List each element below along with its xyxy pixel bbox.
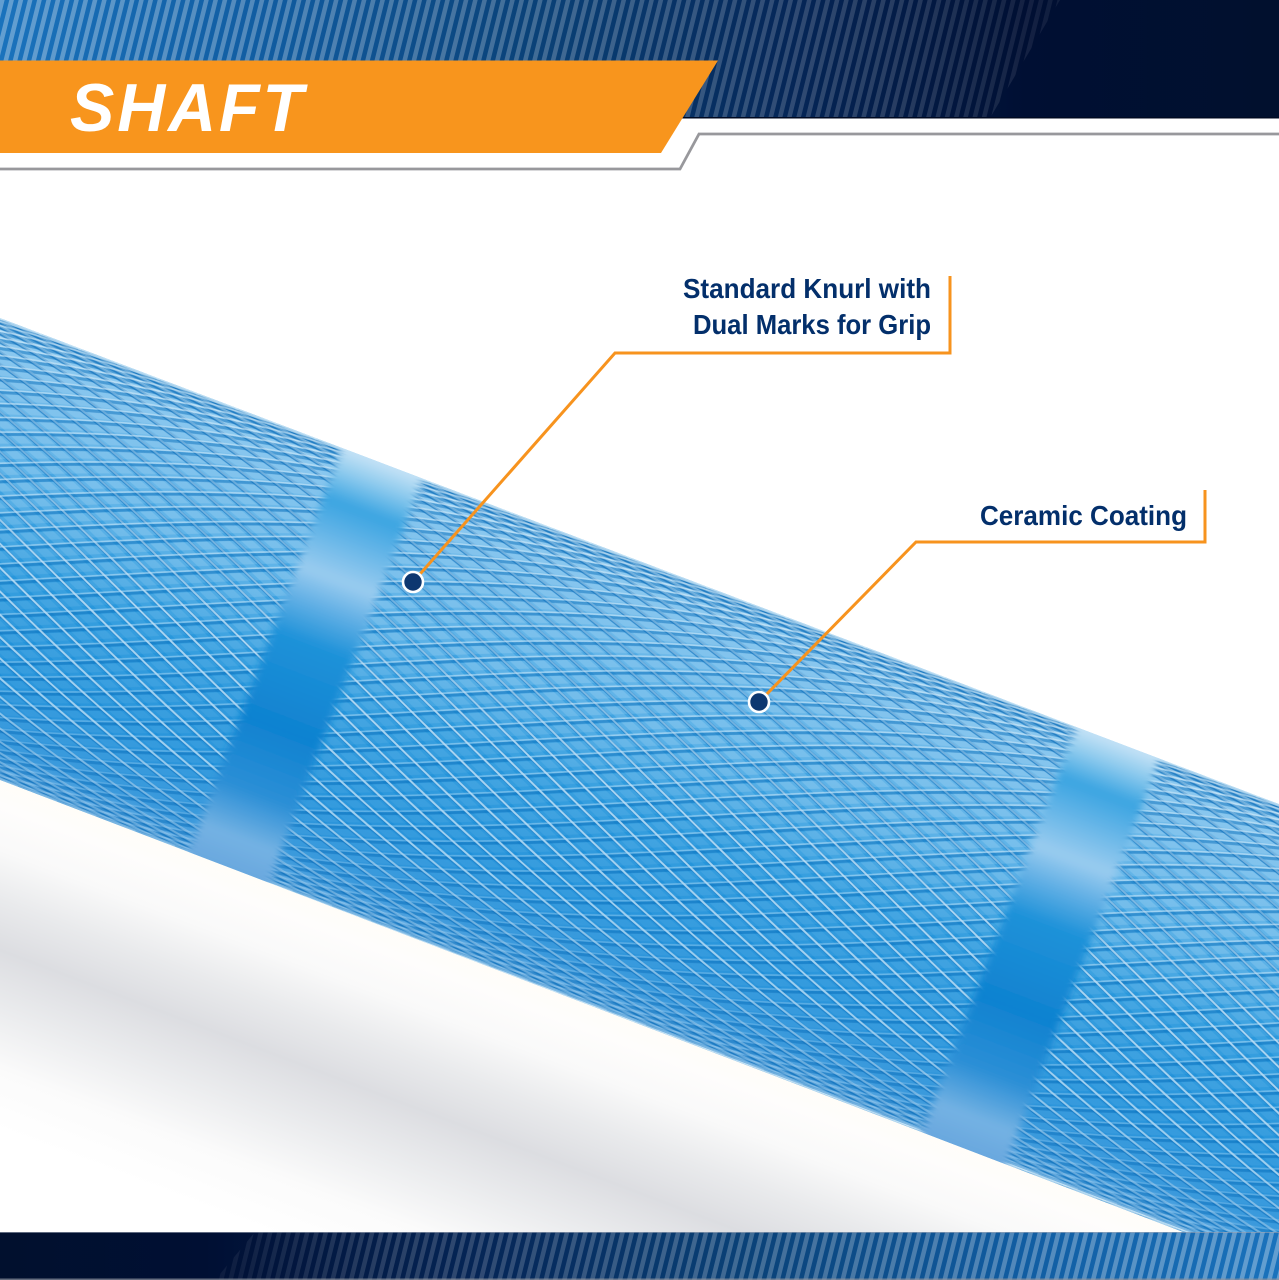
leader line: ceramic coating — [759, 490, 1205, 702]
knurl diamond lattice — [0, 318, 1279, 1232]
label: standard knurl — [683, 273, 931, 340]
header rule line — [0, 134, 1279, 169]
shaft base shading — [0, 318, 1279, 1232]
unknurled ring: left — [185, 448, 426, 884]
title: SHAFT — [70, 70, 308, 146]
unknurled ring: right — [916, 708, 1167, 1181]
studio background shadow — [0, 770, 1210, 1232]
orange title banner — [0, 60, 718, 153]
marker dot: ceramic coating — [749, 692, 769, 712]
leader line: standard knurl — [413, 276, 950, 582]
bottom footer band — [0, 1232, 1279, 1280]
label: standard knurl: Dual Marks for Grip — [693, 309, 931, 340]
label: standard knurl: Standard Knurl with — [683, 273, 931, 304]
callout: ceramic coating — [749, 490, 1205, 712]
knurled ceramic-coated bar shaft — [0, 318, 1279, 1232]
label: ceramic coating: Ceramic Coating — [980, 500, 1187, 531]
top header band — [0, 0, 1279, 118]
callout: standard knurl — [403, 273, 950, 592]
marker dot: standard knurl — [403, 572, 423, 592]
